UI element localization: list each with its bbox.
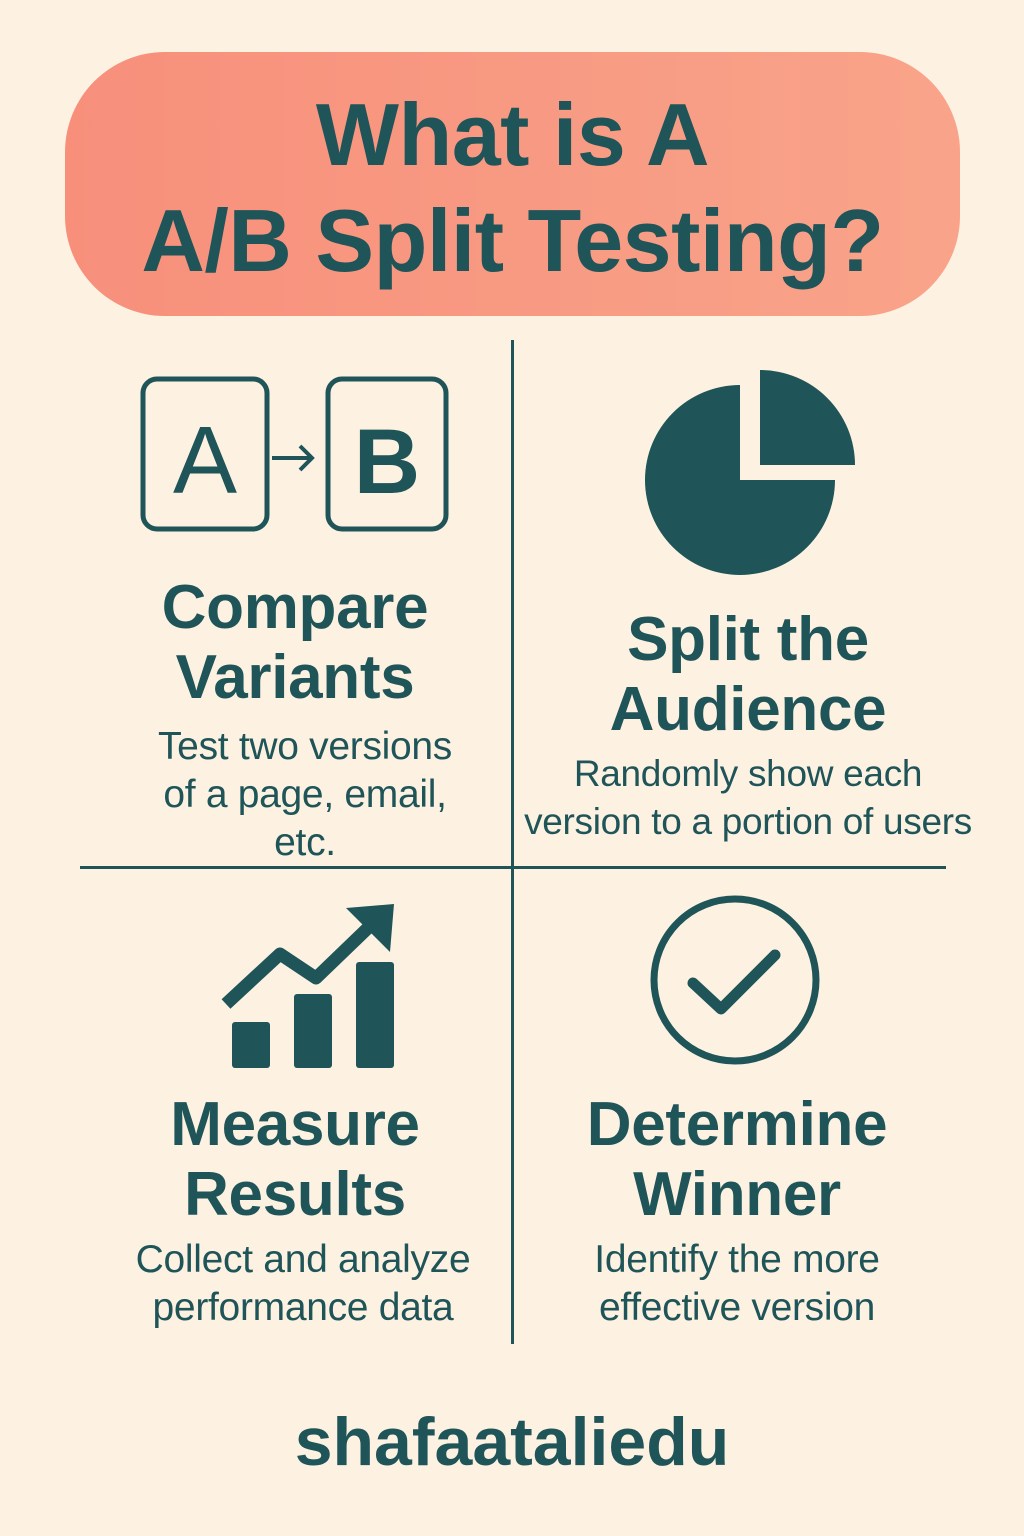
- footer brand: shafaataliedu: [295, 1404, 729, 1480]
- icon: A to B: A: [173, 407, 237, 514]
- heading: Measure: [170, 1090, 420, 1159]
- title text: What is A: [316, 85, 709, 184]
- panel: compare variants: [140, 376, 452, 864]
- heading: Audience: [610, 675, 886, 744]
- heading: Variants: [176, 643, 414, 712]
- description: [158, 725, 452, 864]
- description: version to a portion of users: [524, 801, 972, 842]
- description: [136, 1238, 470, 1329]
- icon: A to B: [140, 376, 448, 532]
- icon: pie chart: [645, 370, 855, 575]
- heading: Compare: [162, 573, 428, 642]
- description: Test two versions: [158, 725, 452, 768]
- description: effective version: [599, 1286, 875, 1329]
- title pill: [65, 52, 960, 316]
- panel: measure results: [136, 904, 470, 1329]
- heading: [170, 1090, 420, 1229]
- description: Randomly show each: [574, 753, 922, 794]
- panel: determine winner: [587, 896, 887, 1329]
- description: performance data: [153, 1286, 453, 1329]
- heading: [162, 573, 428, 712]
- heading: Determine: [587, 1090, 887, 1159]
- title text: [141, 85, 884, 290]
- panel: split the audience: [524, 370, 972, 842]
- title text: A/B Split Testing?: [141, 191, 884, 290]
- heading: Split the: [627, 605, 869, 674]
- description: of a page, email,: [163, 773, 447, 816]
- description: Collect and analyze: [136, 1238, 470, 1281]
- description: [524, 753, 972, 842]
- description: [594, 1238, 880, 1329]
- icon: A to B: B: [354, 411, 420, 513]
- description: Identify the more: [594, 1238, 880, 1281]
- icon: check circle: [650, 896, 820, 1064]
- heading: Results: [184, 1160, 406, 1229]
- heading: [587, 1090, 887, 1229]
- heading: Winner: [633, 1160, 841, 1229]
- icon: growth chart: [222, 904, 394, 1068]
- dividers: [511, 340, 514, 1344]
- description: etc.: [274, 821, 336, 864]
- heading: [610, 605, 886, 744]
